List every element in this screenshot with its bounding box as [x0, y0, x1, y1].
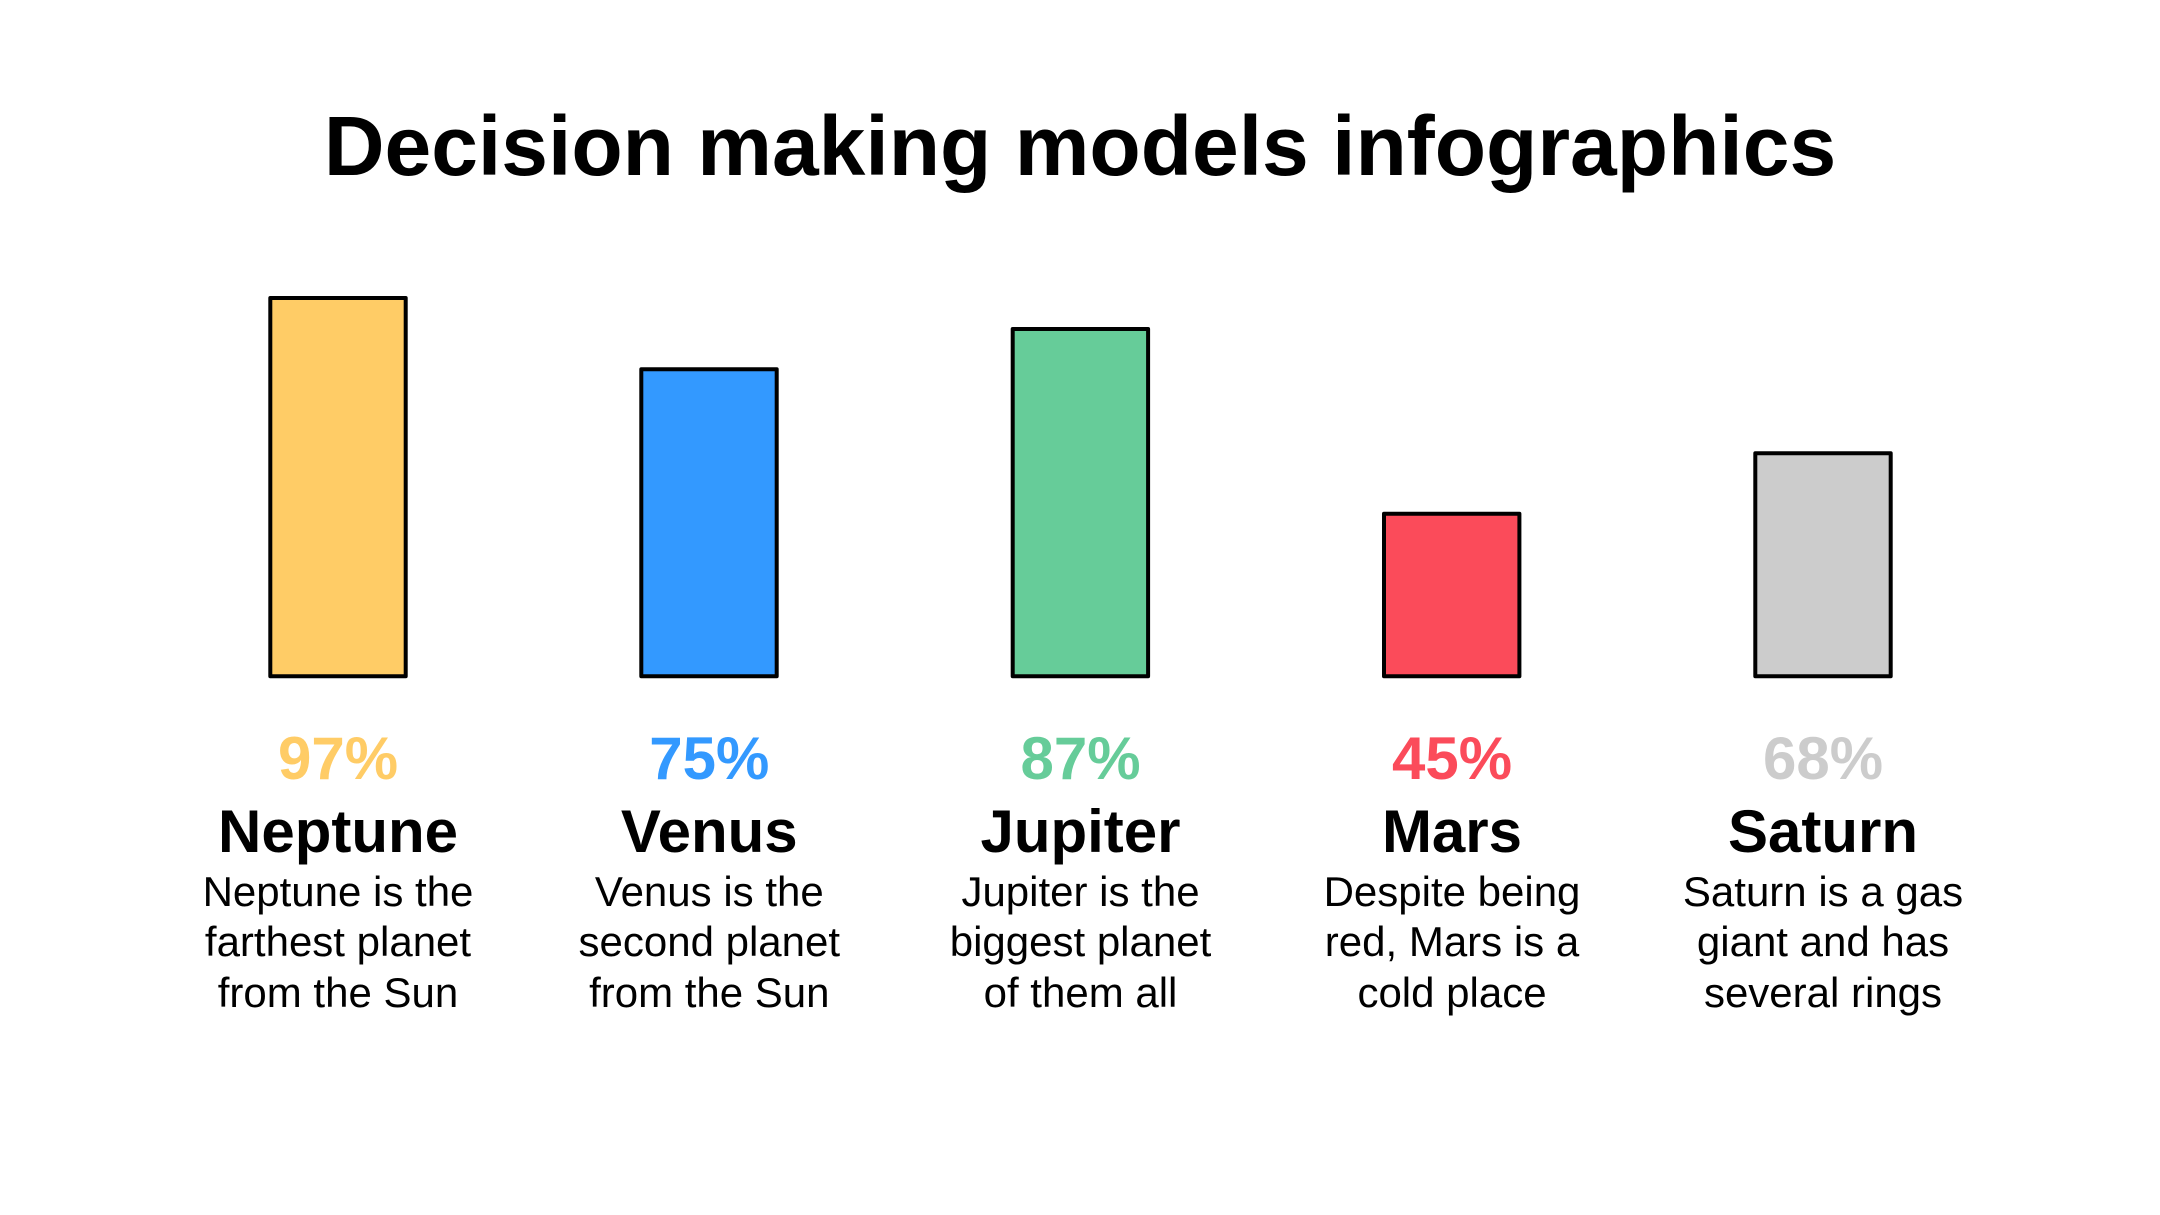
- description: Venus: Venus is the: [595, 868, 824, 915]
- bar: Neptune 97%: [270, 298, 406, 676]
- description: Mars: red, Mars is a: [1325, 918, 1580, 965]
- name: Jupiter: Jupiter: [980, 798, 1181, 865]
- bar: Jupiter 87%: [1013, 329, 1148, 676]
- description: Mars: Despite being: [1324, 868, 1580, 915]
- description: Saturn: Saturn is a gas: [1683, 868, 1963, 915]
- name: Neptune: Neptune: [218, 798, 458, 865]
- column: Neptune: [203, 298, 473, 1016]
- description: Mars: cold place: [1357, 969, 1547, 1016]
- column: Jupiter: [950, 329, 1212, 1016]
- description: Venus: from the Sun: [589, 969, 830, 1016]
- description: Jupiter: [950, 868, 1212, 1016]
- column: Venus: [579, 369, 840, 1016]
- description: Jupiter: biggest planet: [950, 918, 1212, 965]
- description: Mars: [1324, 868, 1580, 1016]
- value: Neptune 97%: 97%: [278, 725, 398, 792]
- description: Saturn: several rings: [1704, 969, 1942, 1016]
- description: Neptune: [203, 868, 473, 1016]
- description: Saturn: [1683, 868, 1963, 1016]
- value: Saturn 68%: 68%: [1763, 725, 1883, 792]
- description: Neptune: farthest planet: [205, 918, 471, 965]
- description: Neptune: Neptune is the: [203, 868, 473, 915]
- bar: Venus 75%: [641, 369, 777, 676]
- description: Venus: second planet: [579, 918, 840, 965]
- description: Jupiter: of them all: [984, 969, 1177, 1016]
- description: Neptune: from the Sun: [218, 969, 458, 1016]
- name: Mars: Mars: [1382, 798, 1522, 865]
- title: Decision making models infographics: [324, 99, 1836, 193]
- bar: Mars 45%: [1384, 514, 1519, 676]
- description: Jupiter: Jupiter is the: [961, 868, 1200, 915]
- value: Mars 45%: 45%: [1392, 725, 1512, 792]
- column: Mars: [1324, 514, 1580, 1016]
- value: Venus 75%: 75%: [649, 725, 769, 792]
- description: Venus: [579, 868, 840, 1016]
- name: Venus: Venus: [621, 798, 798, 865]
- name: Saturn: Saturn: [1728, 798, 1918, 865]
- bar: Saturn 68%: [1755, 453, 1891, 676]
- value: Jupiter 87%: 87%: [1020, 725, 1141, 792]
- column: Saturn: [1683, 453, 1963, 1016]
- description: Saturn: giant and has: [1697, 918, 1949, 965]
